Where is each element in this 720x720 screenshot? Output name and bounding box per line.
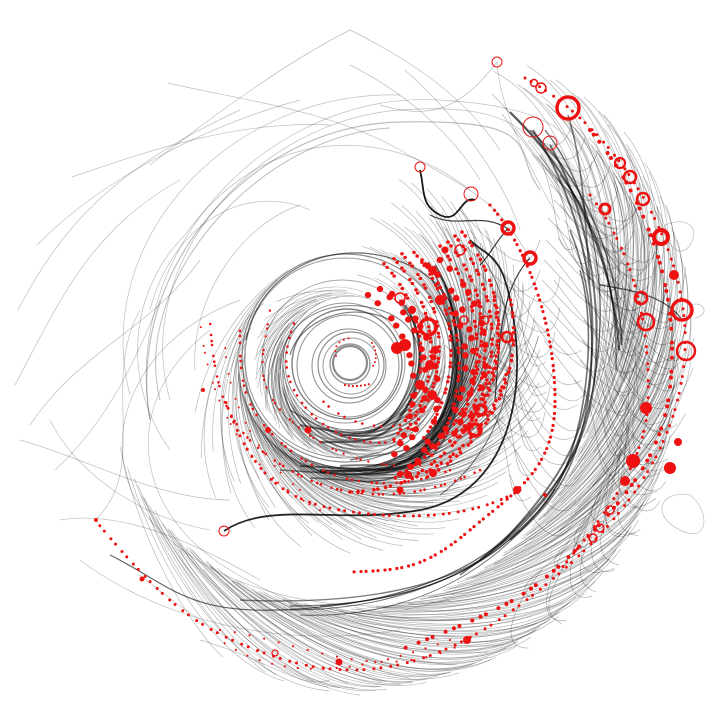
- dark inner bands and hub links: [224, 170, 530, 531]
- red node cluster: [342, 232, 543, 516]
- middle spiral fan: [160, 150, 590, 594]
- right rim fan arcs: [445, 94, 720, 653]
- red node rims: [95, 78, 685, 670]
- concentric core rings: [242, 253, 461, 471]
- outer spiral fan: [120, 66, 694, 692]
- solid red nodes: [94, 246, 682, 666]
- large red hub rings: [219, 57, 695, 656]
- inner spiral fan: [193, 239, 503, 513]
- dark outer bands: [110, 112, 682, 615]
